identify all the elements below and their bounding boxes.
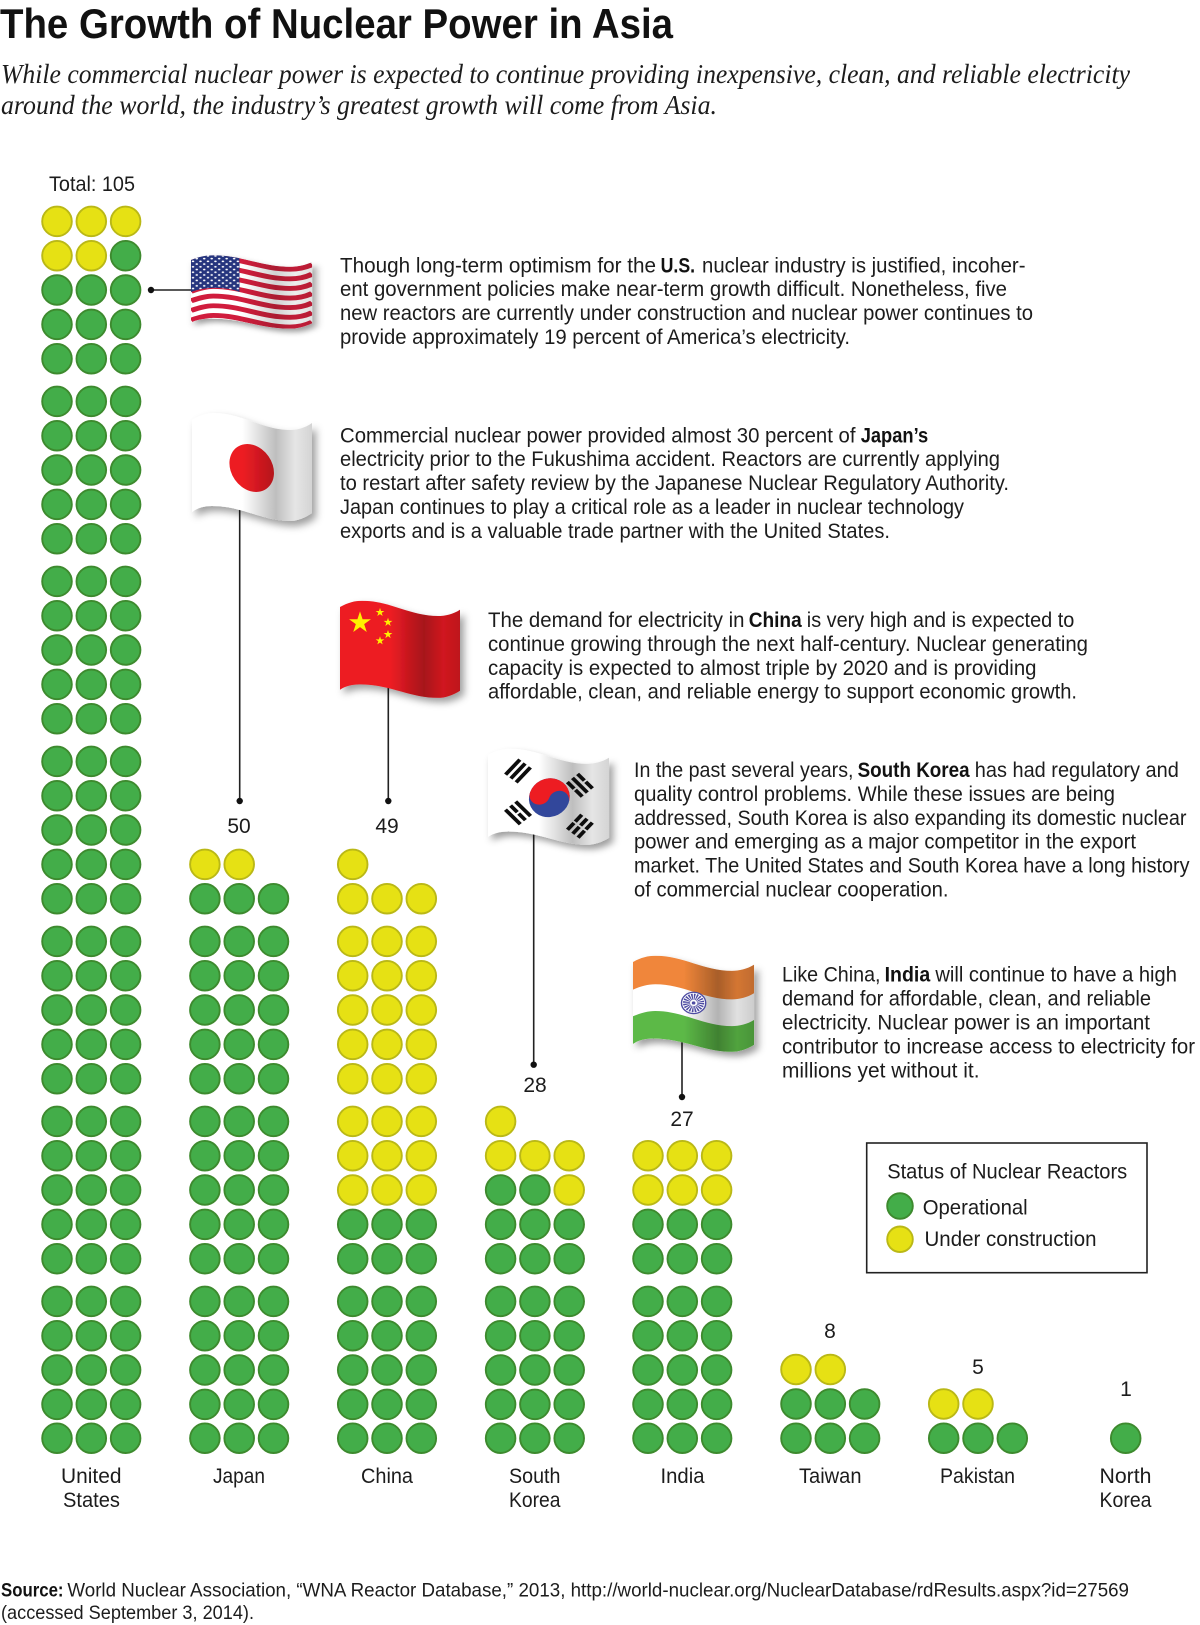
text block: United States: provide approximately 19 percent of America’s electricity. xyxy=(340,326,850,349)
country labels: United xyxy=(61,1465,122,1488)
icon: South Korea flag xyxy=(488,744,609,851)
legend title: Status of Nuclear Reactors xyxy=(887,1160,1127,1184)
totals above columns: 49 xyxy=(375,815,399,838)
connector: United States xyxy=(148,287,192,293)
country labels: North xyxy=(1100,1465,1152,1488)
totals above columns: 27 xyxy=(670,1108,694,1131)
text block: United States: Though long-term optimism for the xyxy=(340,254,656,278)
text block: United States xyxy=(340,254,1033,349)
text block: Japan: Commercial nuclear power provided almost 30 percent of xyxy=(340,424,856,447)
legend xyxy=(867,1143,1147,1273)
text block: India: Like China, xyxy=(782,964,880,987)
connector: South Korea xyxy=(530,832,537,1068)
chart column: India, 27 reactors xyxy=(633,1141,731,1453)
title: The Growth of Nuclear Power in Asia xyxy=(0,0,674,47)
subtitle: around the world, the industry’s greatest growth will come from Asia. xyxy=(1,90,717,120)
legend item: under construction: Under construction xyxy=(924,1228,1096,1251)
icon: India flag xyxy=(633,944,754,1069)
text block: China: The demand for electricity in xyxy=(488,609,744,632)
icon: Japan flag xyxy=(192,408,312,528)
totals above columns: 50 xyxy=(227,815,251,838)
country labels: Japan xyxy=(213,1465,265,1488)
country labels: Korea xyxy=(1100,1489,1152,1512)
chart column: Japan, 50 reactors xyxy=(190,850,288,1453)
connector: India xyxy=(679,1038,685,1100)
text block: United States: nuclear industry is justified, incoher- xyxy=(702,254,1026,278)
subtitle: While commercial nuclear power is expected to continue providing inexpensive, clean, and reliable electricity xyxy=(1,59,1130,89)
text block: South Korea xyxy=(634,759,1190,902)
icon: China flag xyxy=(340,596,460,704)
totals above columns: 5 xyxy=(972,1356,984,1379)
totals above columns: 8 xyxy=(824,1320,836,1343)
text block: China: is very high and is expected to xyxy=(807,609,1074,632)
text block: United States: ent government policies make near-term growth difficult. Nonetheless, five xyxy=(340,278,1007,301)
text block: China: capacity is expected to almost triple by 2020 and is providing xyxy=(488,657,1036,680)
connector: Japan xyxy=(236,505,243,804)
chart column: China, 49 reactors xyxy=(338,850,436,1453)
chart column: South Korea, 28 reactors xyxy=(486,1107,584,1453)
chart column: Pakistan, 5 reactors xyxy=(929,1389,1027,1453)
text block: India: contributor to increase access to electricity for xyxy=(782,1035,1195,1058)
text block: South Korea: quality control problems. While these issues are being xyxy=(634,783,1115,806)
totals above columns xyxy=(227,815,1132,1401)
text block: India: India xyxy=(885,964,930,987)
subtitle xyxy=(1,59,1130,120)
source note: Source: xyxy=(1,1580,64,1602)
source note xyxy=(1,1580,1129,1624)
country labels: States xyxy=(63,1489,120,1512)
text block: Japan: to restart after safety review by the Japanese Nuclear Regulatory Authority. xyxy=(340,472,1009,495)
country labels xyxy=(61,1465,1152,1512)
chart column: Taiwan, 8 reactors xyxy=(781,1355,879,1453)
text block: Japan: exports and is a valuable trade partner with the United States. xyxy=(340,520,890,543)
text block: China: China xyxy=(749,609,802,632)
text block: India: demand for affordable, clean, and reliable xyxy=(782,988,1151,1011)
text block: South Korea: of commercial nuclear cooperation. xyxy=(634,878,948,902)
legend item: operational: Operational xyxy=(923,1196,1028,1220)
text block: India: electricity. Nuclear power is an important xyxy=(782,1012,1150,1034)
country labels: China xyxy=(361,1465,413,1488)
text block: India xyxy=(782,964,1195,1082)
text block: China: affordable, clean, and reliable energy to support economic growth. xyxy=(488,681,1077,704)
text block: China: continue growing through the next half-century. Nuclear generating xyxy=(488,633,1088,656)
text block: South Korea: South Korea xyxy=(858,759,970,782)
country labels: India xyxy=(660,1465,705,1488)
text block: Japan: Japan continues to play a critical role as a leader in nuclear technology xyxy=(340,496,964,519)
country labels: South xyxy=(509,1465,560,1488)
text block: India: millions yet without it. xyxy=(782,1059,980,1082)
source note: (accessed September 3, 2014). xyxy=(1,1602,254,1624)
text block: South Korea: power and emerging as a major competitor in the export xyxy=(634,831,1136,854)
text block: South Korea: has had regulatory and xyxy=(975,759,1179,782)
totals above columns: 28 xyxy=(523,1074,547,1097)
country labels: Korea xyxy=(509,1489,561,1512)
connector: China xyxy=(385,685,391,804)
legend item: operational xyxy=(887,1193,1028,1220)
chart column: North Korea, 1 reactor xyxy=(1111,1423,1140,1453)
totals above columns: 1 xyxy=(1120,1378,1132,1401)
text block: United States: U.S. xyxy=(661,254,695,278)
text block: India: will continue to have a high xyxy=(934,964,1177,987)
text block: China xyxy=(488,609,1088,704)
icon: United States flag xyxy=(189,252,314,333)
text block: Japan xyxy=(340,424,1009,543)
text block: South Korea: In the past several years, xyxy=(634,759,854,782)
source note: World Nuclear Association, “WNA Reactor Database,” 2013, http://world-nuclear.org/NuclearDatabase/rdResults.aspx?id=27569 xyxy=(67,1580,1129,1602)
country labels: Pakistan xyxy=(940,1465,1015,1488)
chart column: United States, 105 reactors xyxy=(42,207,140,1453)
text block: United States: new reactors are currently under construction and nuclear power continues to xyxy=(340,302,1033,325)
total label: United States: Total: 105 xyxy=(49,173,135,196)
country labels: Taiwan xyxy=(799,1465,862,1488)
text block: Japan: Japan’s xyxy=(861,424,928,447)
text block: Japan: electricity prior to the Fukushima accident. Reactors are currently applying xyxy=(340,448,1000,471)
